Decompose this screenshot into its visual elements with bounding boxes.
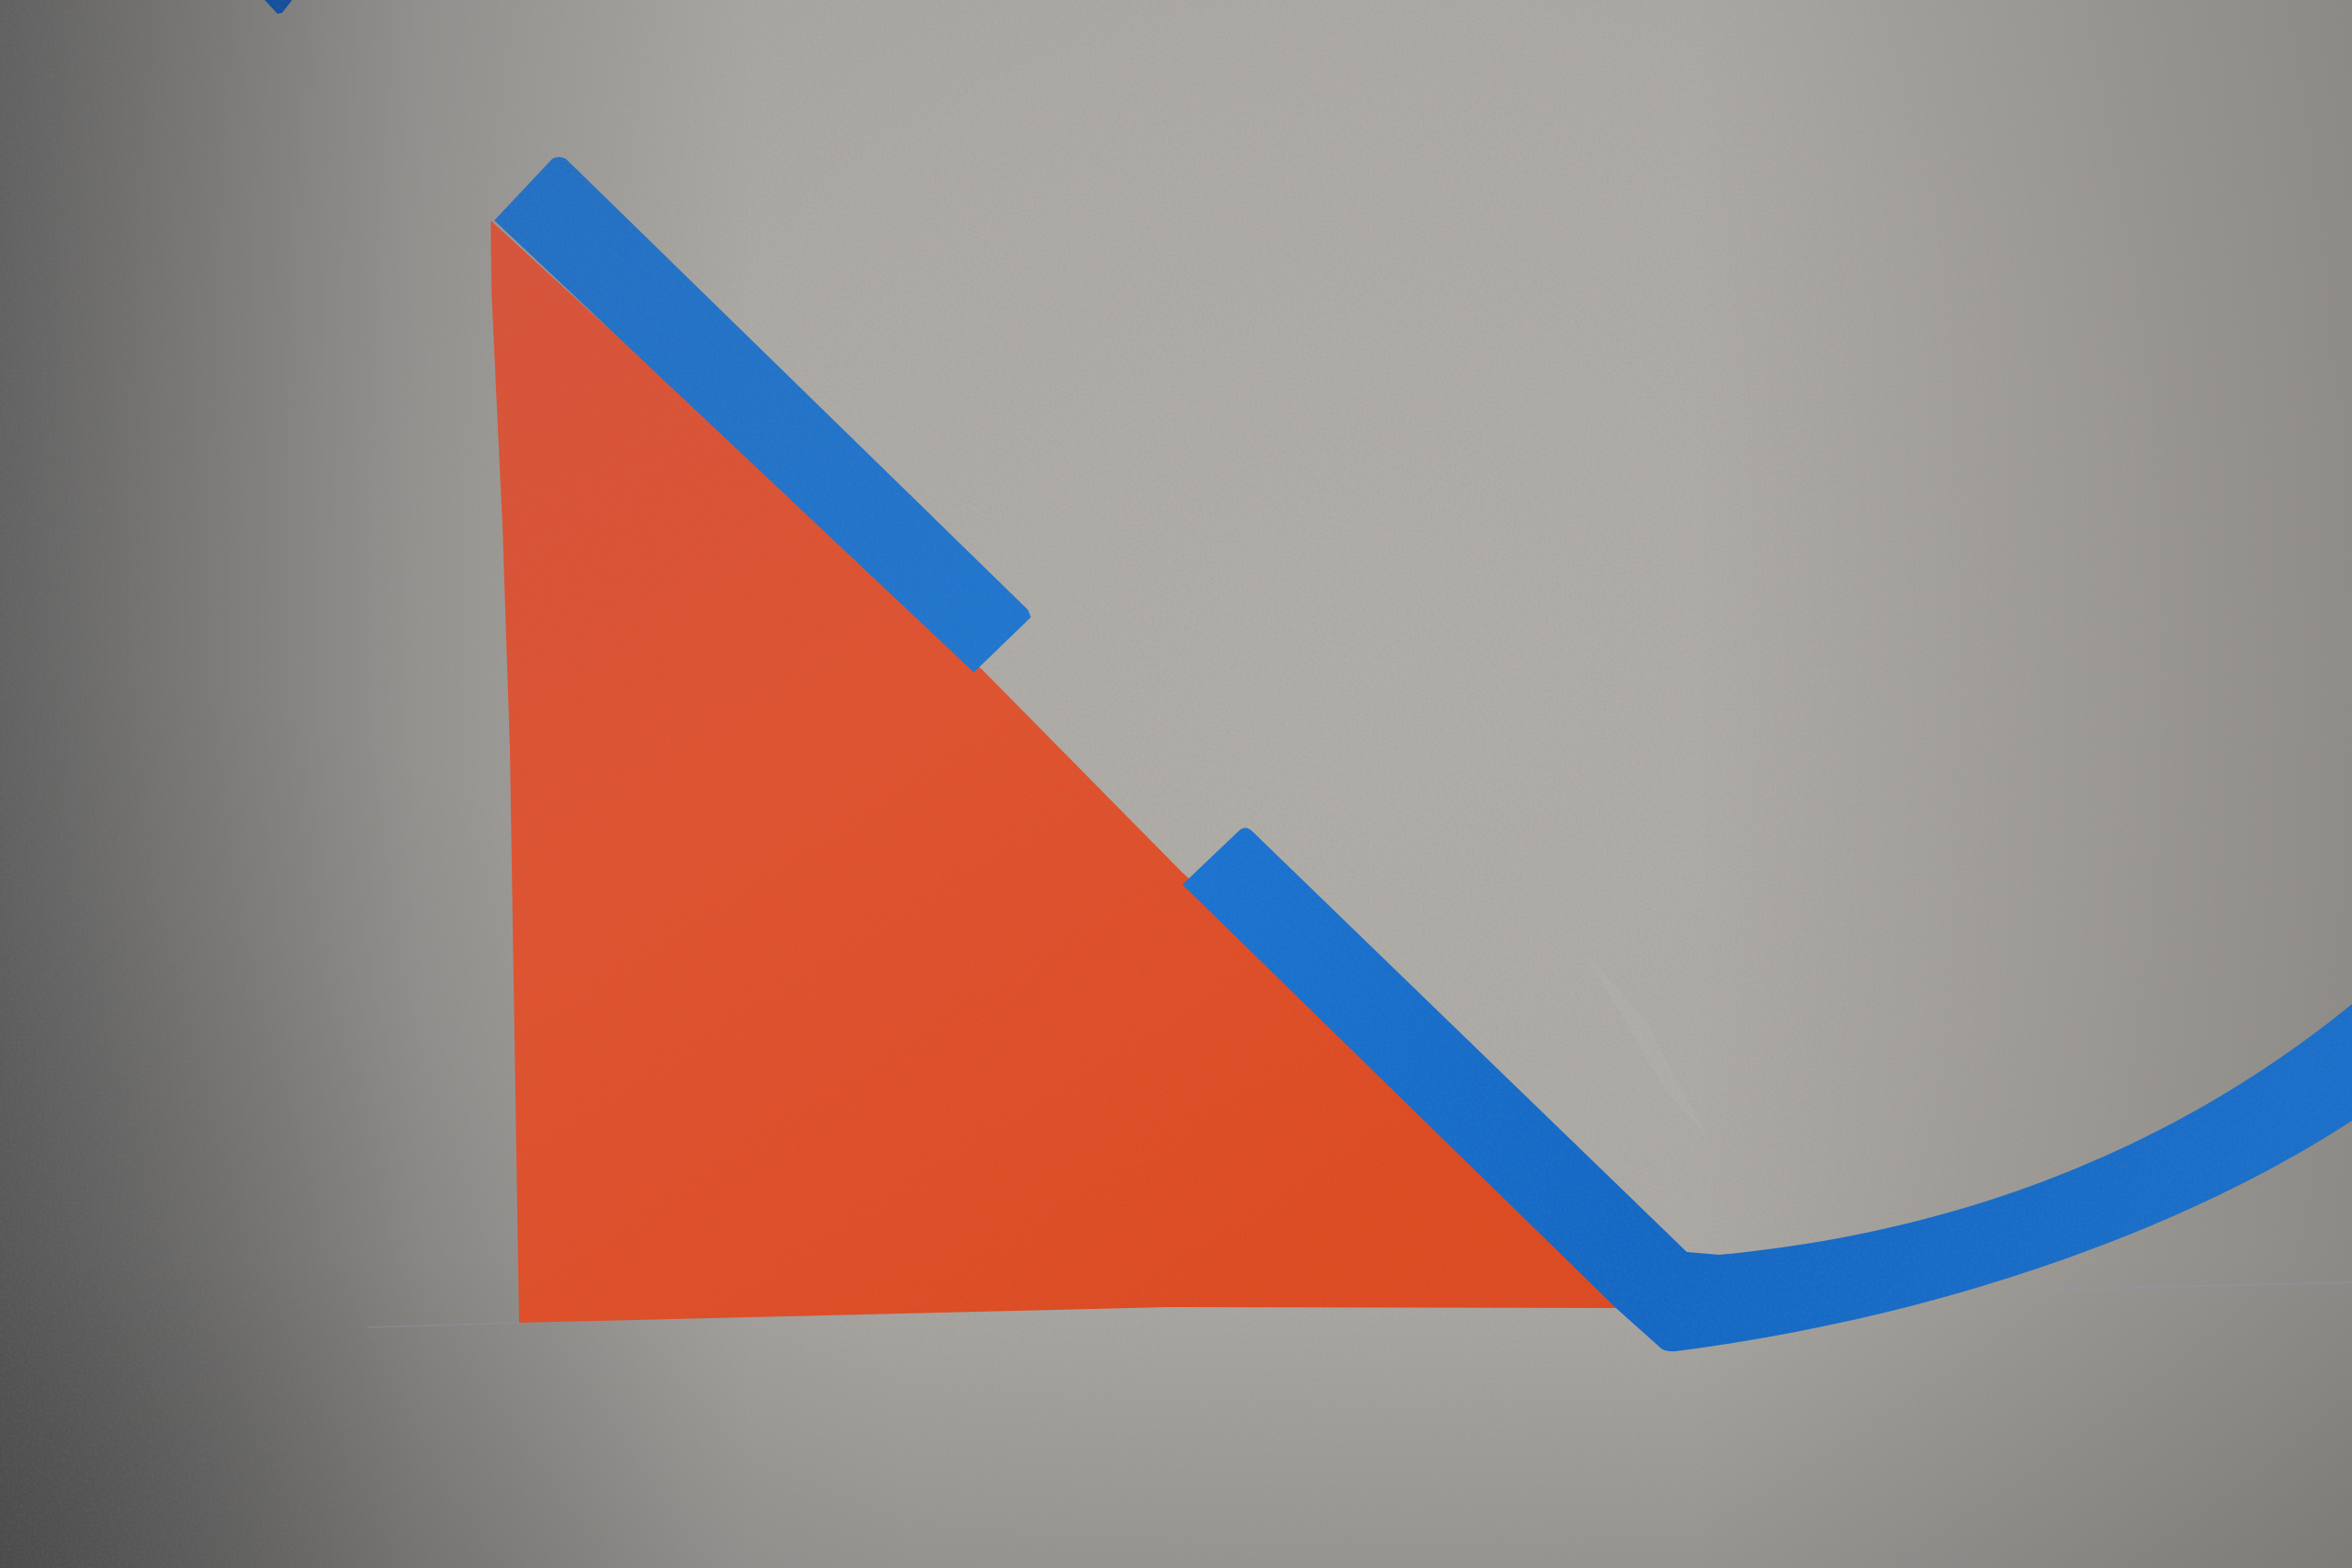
blue fragment at top edge [265, 0, 292, 14]
pencil guide line: right [2049, 1282, 2352, 1290]
pale sheen on wall [1580, 946, 1709, 1139]
pencil guide line: left [368, 1323, 520, 1327]
orange triangle [491, 220, 1645, 1323]
lower blue stripe with curve [1182, 828, 2352, 1351]
upper blue stripe [494, 157, 1031, 672]
